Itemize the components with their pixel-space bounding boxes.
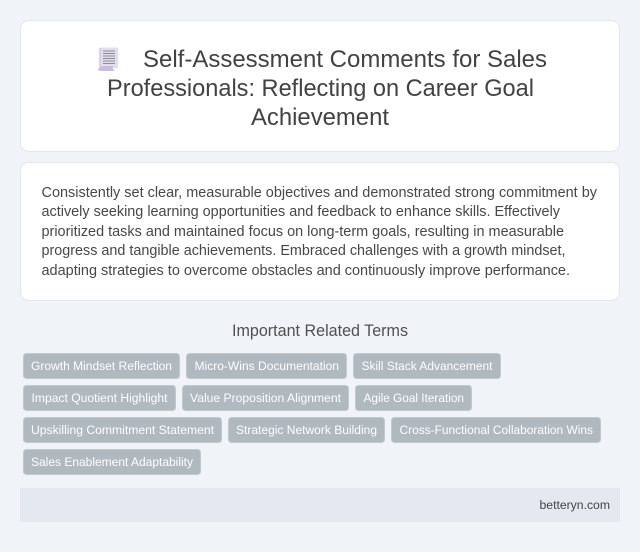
title: Self-Assessment Comments for Sales	[143, 46, 547, 73]
tag: Cross-Functional Collaboration Wins	[400, 423, 593, 437]
text block: summary	[42, 185, 598, 279]
tag: Value Proposition Alignment	[190, 391, 342, 405]
text block: summary: prioritized tasks and maintained focus on long-term goals, resulting in measurable	[42, 224, 564, 240]
tag	[356, 386, 472, 410]
tag list	[24, 354, 600, 474]
tag	[182, 386, 348, 410]
tag: Sales Enablement Adaptability	[31, 455, 194, 469]
text block: summary: adapting strategies to overcome obstacles and continuously improve performance.	[42, 263, 570, 279]
tag	[228, 418, 384, 442]
tag	[24, 354, 180, 378]
tag	[24, 418, 222, 442]
tag: Growth Mindset Reflection	[31, 359, 172, 373]
tag: Upskilling Commitment Statement	[31, 423, 215, 437]
tag: Agile Goal Iteration	[364, 391, 464, 405]
tag	[392, 418, 600, 442]
tag	[24, 450, 200, 474]
tag: Impact Quotient Highlight	[32, 391, 168, 405]
title: Achievement	[251, 104, 389, 131]
text block: summary: progress and tangible achievements. Embraced challenges with a growth mindset,	[42, 243, 566, 259]
icon: document scroll	[98, 48, 118, 71]
text block: summary: Consistently set clear, measurable objectives and demonstrated strong commitment by	[42, 185, 598, 201]
footer text: betteryn.com	[540, 498, 610, 512]
panel: title card	[20, 20, 620, 152]
tag	[24, 386, 176, 410]
tag: Strategic Network Building	[236, 423, 377, 437]
heading: related terms: Important Related Terms	[232, 322, 408, 340]
title: Professionals: Reflecting on Career Goal	[107, 75, 534, 102]
tag	[186, 354, 346, 378]
footer bar	[20, 488, 620, 522]
tag	[354, 354, 500, 378]
title	[107, 46, 547, 131]
tag: Skill Stack Advancement	[362, 359, 493, 373]
panel: summary card	[20, 162, 620, 300]
tag: Micro-Wins Documentation	[194, 359, 339, 373]
text block: summary: actively seeking learning opportunities and feedback to enhance skills. Effectively	[42, 204, 561, 220]
